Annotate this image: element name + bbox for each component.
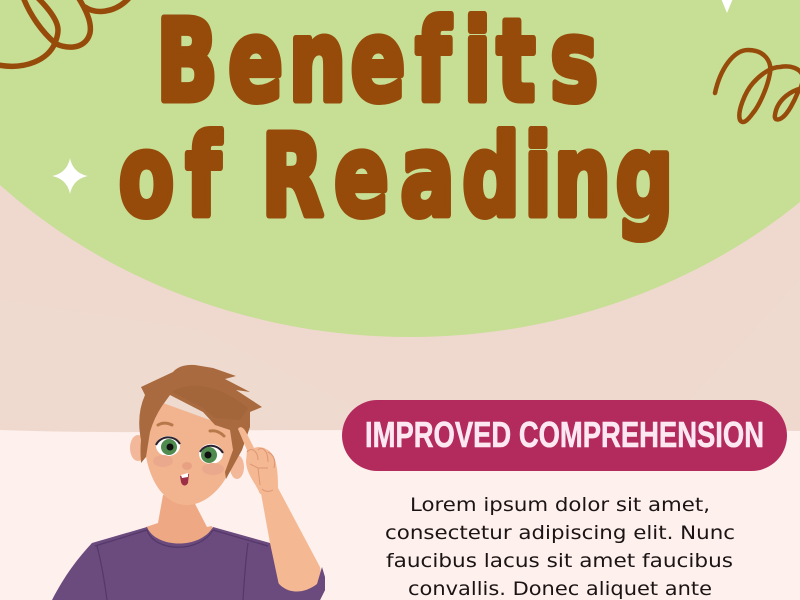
shirt seams: [95, 530, 268, 600]
eyebrows: [158, 423, 224, 436]
sparkle: left of title: [52, 158, 88, 194]
hair highlight: [172, 386, 248, 420]
body text: consectetur adipiscing elit. Nunc: [385, 522, 735, 544]
nose: [182, 462, 192, 470]
face: [145, 403, 234, 505]
pill heading: improved comprehension: [342, 400, 787, 471]
cheeks: [153, 455, 224, 475]
rolled sleeve: [275, 567, 325, 600]
mouth: [180, 473, 189, 486]
title line: Benefits: Benefits: [156, 0, 598, 128]
body text: [385, 494, 735, 600]
ears: [130, 435, 244, 479]
eyes: [156, 436, 223, 464]
hair: [139, 365, 262, 479]
shirt: [52, 527, 325, 600]
sparkle: top right: [720, 0, 734, 13]
title: [119, 0, 673, 243]
body text: Lorem ipsum dolor sit amet,: [410, 494, 710, 516]
decorative swirl: top right: [715, 50, 800, 122]
green circle header background: [0, 0, 800, 337]
body text: faucibus lacus sit amet faucibus: [386, 550, 733, 572]
arm: [260, 488, 321, 599]
decorative swirl: top left: [0, 0, 130, 66]
body text: convallis. Donec aliquet ante: [408, 578, 712, 600]
title line: of Reading: of Reading: [119, 112, 673, 243]
character: boy pointing to his head: [52, 365, 325, 600]
neck: [145, 495, 215, 548]
hand pointing: [238, 427, 278, 494]
